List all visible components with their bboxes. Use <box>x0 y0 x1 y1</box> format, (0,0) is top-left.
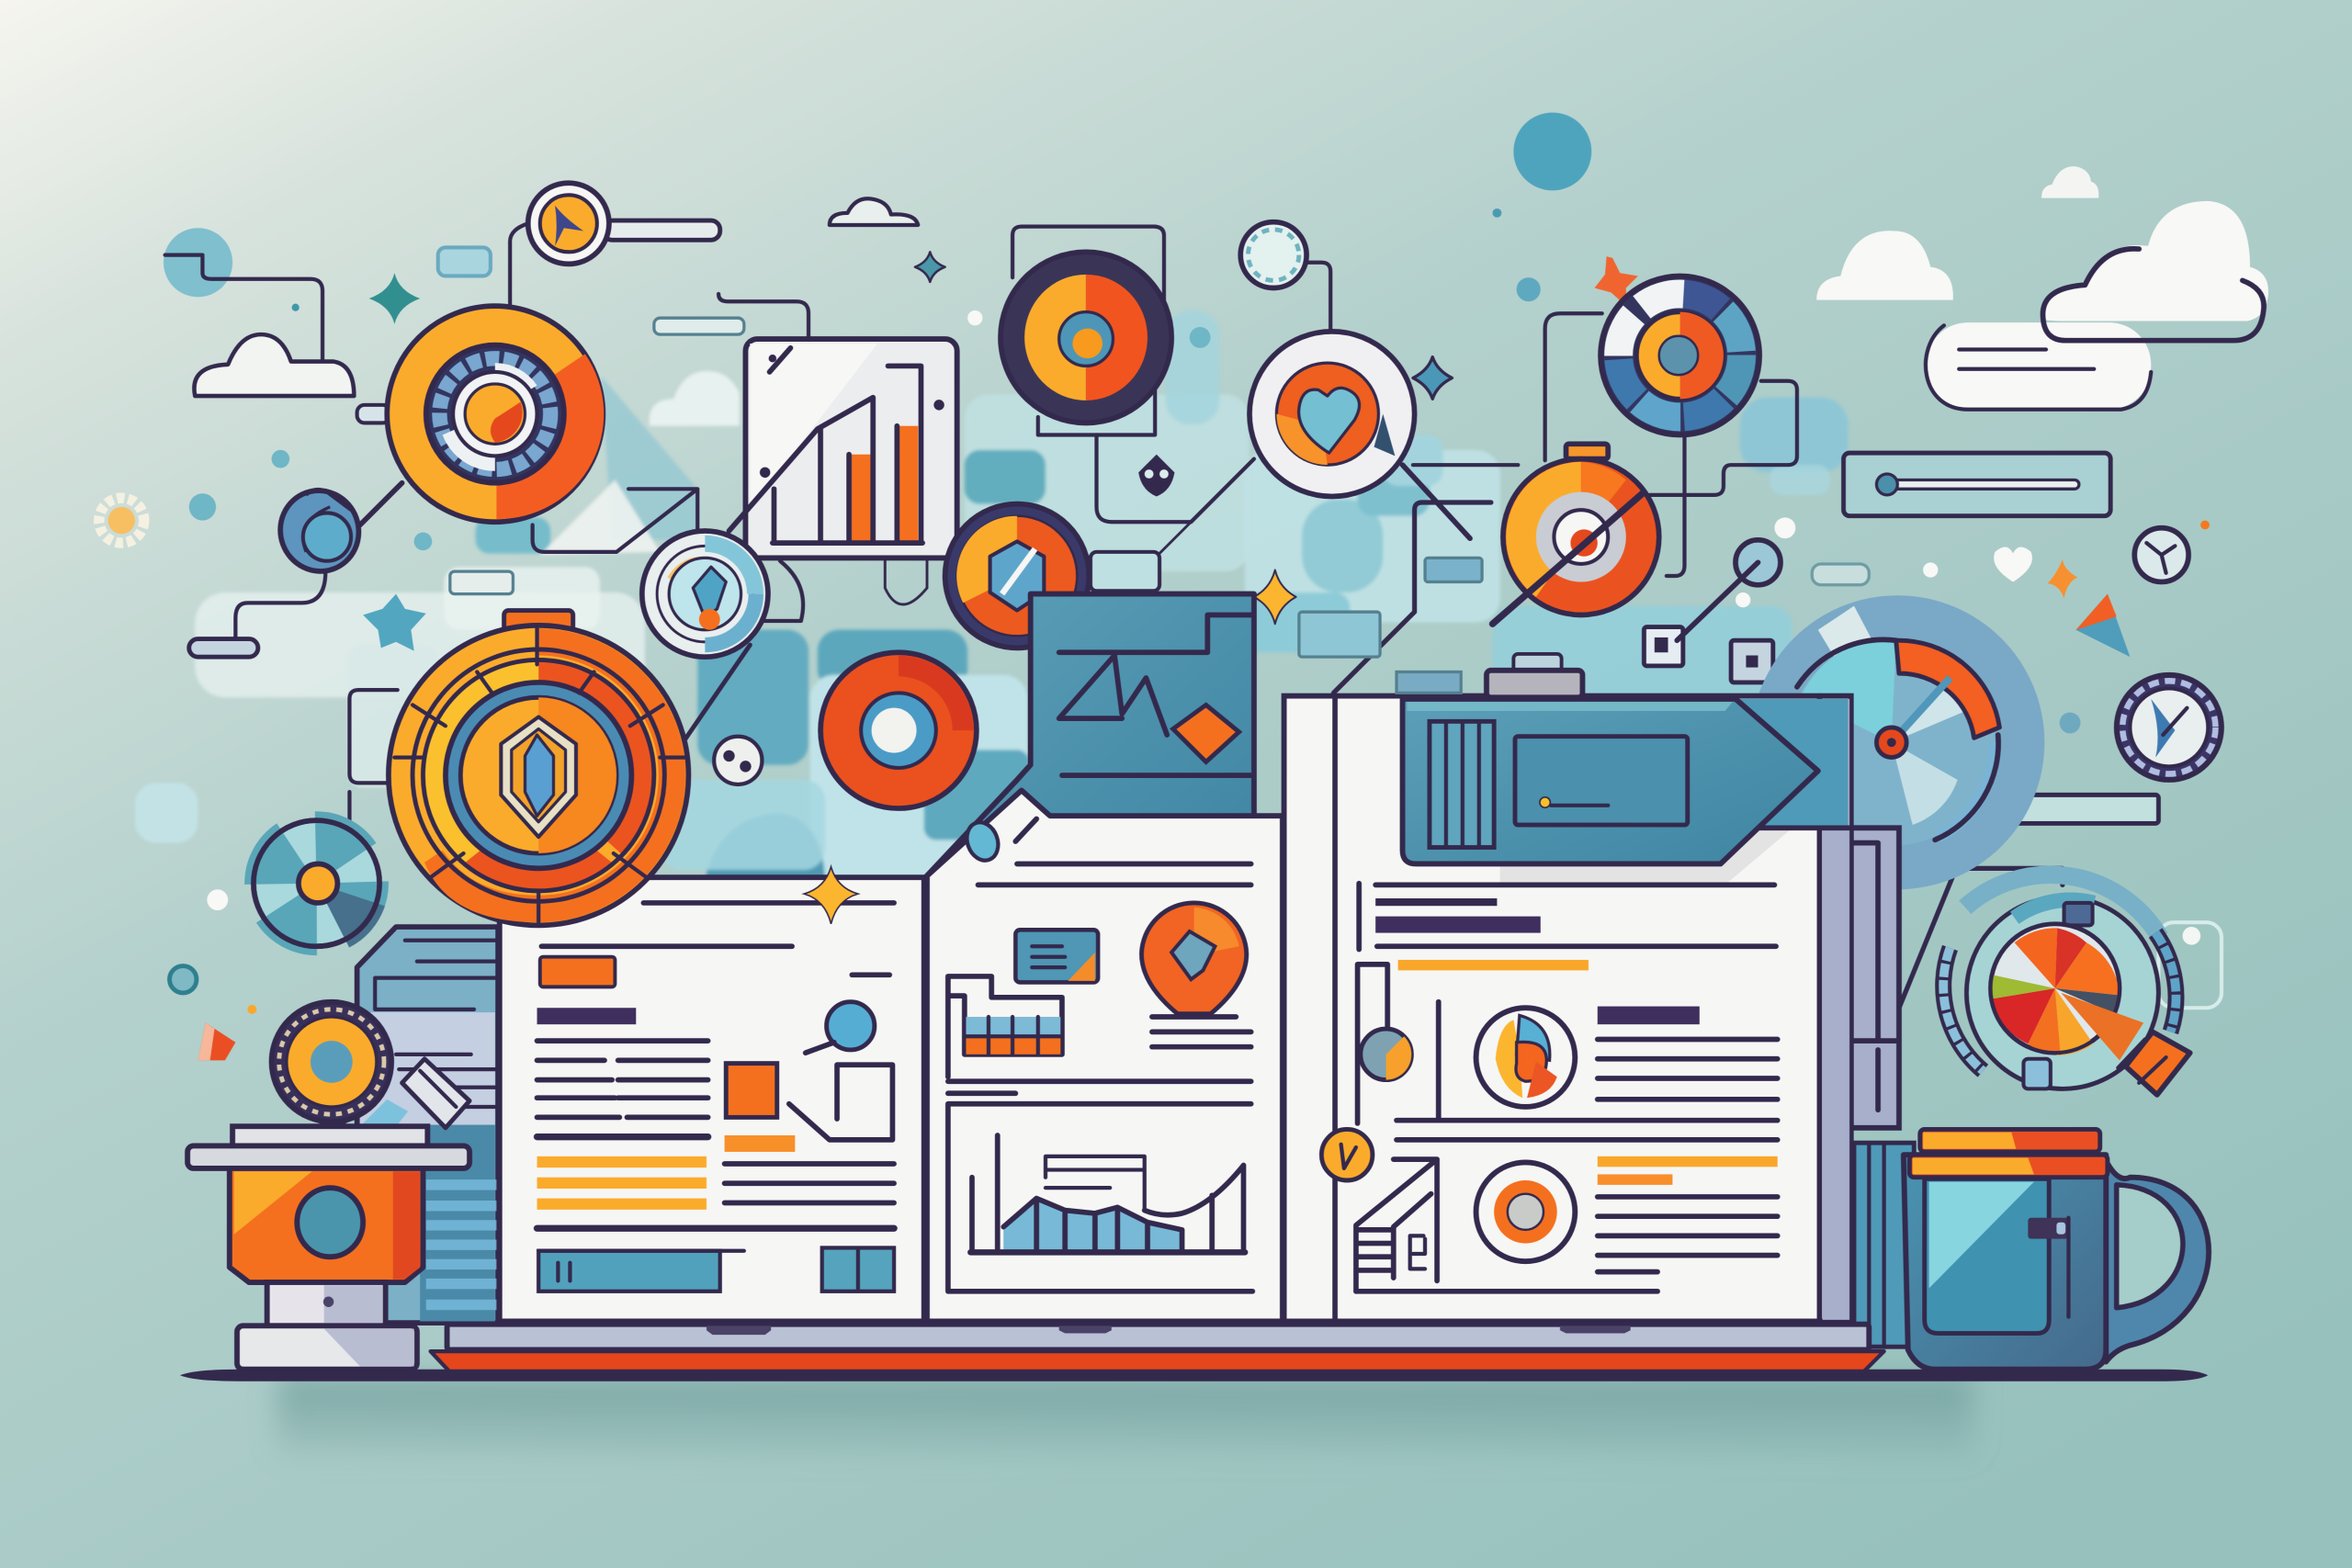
bar chart card <box>729 339 957 558</box>
clouds top left <box>194 198 918 396</box>
gray side strips right <box>1851 828 1899 1128</box>
circular icon: small connector knob left <box>269 479 370 582</box>
circular icon: large orange target <box>389 611 688 925</box>
small labels and sliders <box>189 220 2158 823</box>
soft blue background shapes <box>135 310 1848 879</box>
circular icon: pin with line <box>1677 540 1781 640</box>
circular icon: small amber top <box>528 183 609 264</box>
clouds top right <box>1816 166 2268 410</box>
pedestal object left <box>187 1126 469 1370</box>
circular icon: small ring top centre <box>1240 222 1306 288</box>
circular icon: orange dial with needle <box>1492 444 1659 624</box>
document panel 1 <box>500 877 924 1321</box>
coffee mug right <box>1904 1129 2209 1370</box>
laptop base <box>431 1325 1884 1375</box>
folder tab on panel 3 <box>1396 654 1818 863</box>
ground line <box>180 1370 2208 1382</box>
document: back sheet left <box>357 927 498 1323</box>
pie chart dial right <box>1943 874 2190 1095</box>
circular icon: dark ring with orange <box>1001 252 1171 423</box>
ground shadow <box>277 1377 1973 1455</box>
small clock right <box>2134 528 2188 581</box>
decorative dots <box>164 112 2210 1014</box>
circular icon: orange and blue dial middle <box>945 504 1089 648</box>
circular icon: teal disc left <box>254 820 379 946</box>
circular icon: blue segmented dial <box>1593 268 1767 443</box>
document panel 2 <box>927 790 1283 1321</box>
gauge graphic right <box>1750 595 2044 889</box>
circular icon: red ring centre <box>820 652 977 808</box>
blue stripes behind mug <box>1854 1143 1914 1347</box>
chart tablet centre <box>924 594 1254 888</box>
circular icon: pale target <box>642 531 768 657</box>
circular icon: white ring with heart <box>1250 332 1415 496</box>
pale rounded rectangle right <box>2158 922 2222 1008</box>
sparkle stars and small shapes <box>99 252 2130 1060</box>
small dial right <box>2117 675 2222 780</box>
small badge left <box>169 965 197 993</box>
document panel 3 <box>1284 696 1851 1321</box>
small white gear <box>714 737 762 784</box>
circular icon: large orange dial top left <box>387 306 604 522</box>
small orbit icon lower left <box>272 1002 469 1128</box>
star on document <box>804 867 858 924</box>
connector lines <box>165 223 2063 1015</box>
